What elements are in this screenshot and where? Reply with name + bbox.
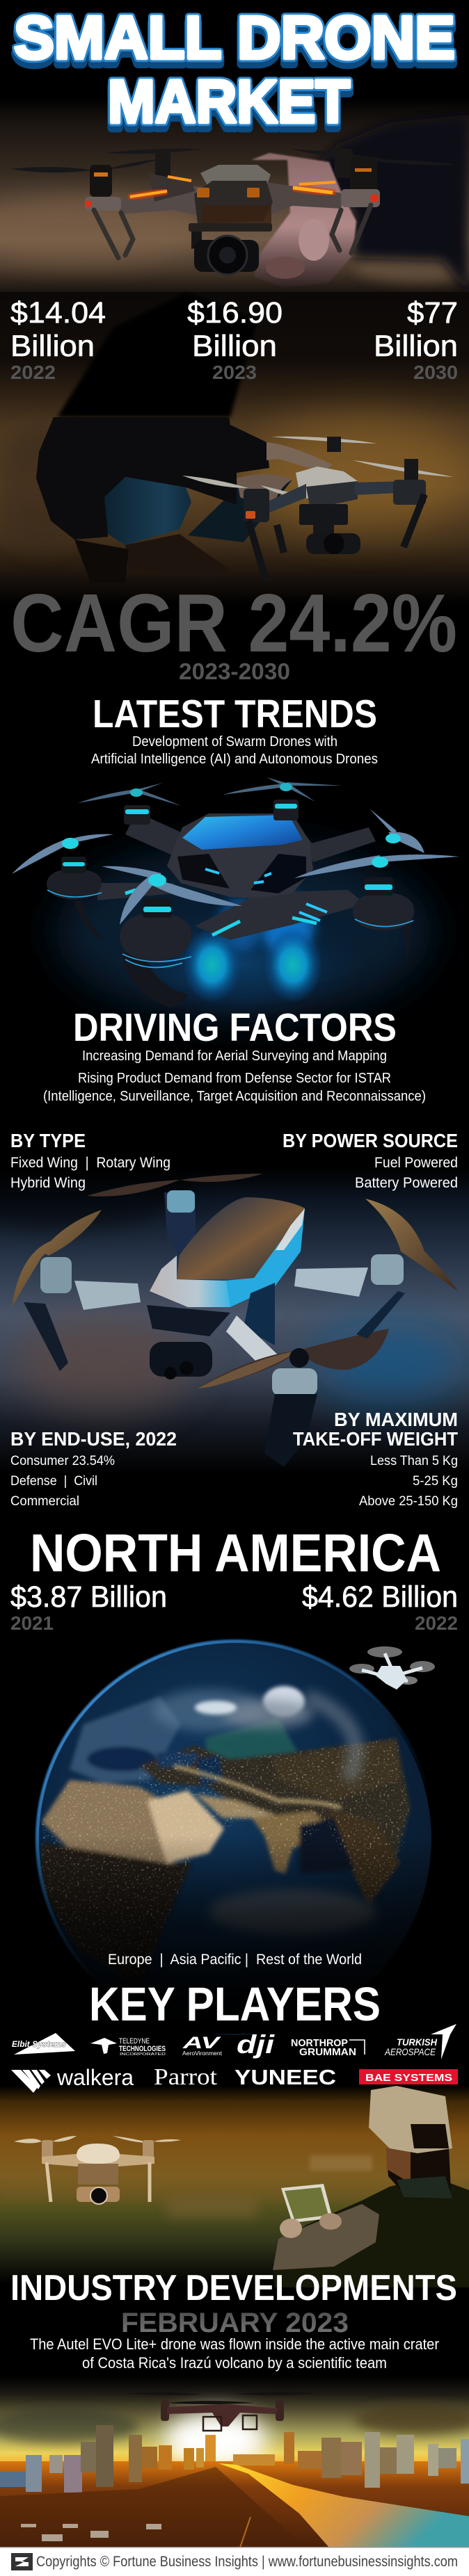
driving factors text: (Intelligence, Surveillance, Target Acquisition and Reconnaissance) bbox=[43, 1089, 426, 1104]
panel: by end-use: Commercial bbox=[10, 1494, 79, 1509]
icon: small white drone bbox=[349, 1646, 435, 1690]
panel: by maximum take-off weight bbox=[293, 1409, 458, 1509]
panel: by maximum take-off weight: TAKE-OFF WEIGHT bbox=[293, 1428, 458, 1450]
logo: Parrot: Parrot bbox=[154, 2064, 218, 2090]
market value 2023 bbox=[187, 296, 283, 383]
development text: of Costa Rica's Irazú volcano by a scientific team bbox=[82, 2354, 387, 2372]
north america value 2021: $3.87 Billion bbox=[10, 1580, 167, 1614]
market value 2030: Billion bbox=[374, 330, 458, 363]
logo: Teledyne Technologies: TECHNOLOGIES bbox=[119, 2045, 166, 2053]
footer bar bbox=[0, 2547, 469, 2576]
panel: by end-use: Consumer 23.54% bbox=[10, 1454, 115, 1468]
photo: blue glowing drone bbox=[12, 777, 459, 1019]
logo: Yuneec: YUNEEC bbox=[234, 2065, 336, 2089]
panel: by type: Hybrid Wing bbox=[10, 1175, 86, 1191]
title: MARKET bbox=[108, 68, 350, 136]
market value 2030: $77 bbox=[407, 296, 458, 330]
market value 2022: 2022 bbox=[10, 362, 56, 383]
driving factors text: Increasing Demand for Aerial Surveying and Mapping bbox=[82, 1048, 387, 1064]
market value 2023: 2023 bbox=[212, 362, 257, 383]
logo: Walkera: walkera bbox=[56, 2065, 134, 2090]
latest trends text: Artificial Intelligence (AI) and Autonomous Drones bbox=[91, 752, 378, 767]
market value 2022: $14.04 bbox=[10, 296, 106, 330]
logo: BAE Systems: BAE SYSTEMS bbox=[365, 2072, 452, 2084]
title: MARKET bbox=[108, 74, 350, 141]
north america value 2022: 2022 bbox=[415, 1612, 458, 1634]
photo: operator with tablet and drone over field bbox=[0, 2086, 469, 2287]
regions list: Europe | Asia Pacific | Rest of the World bbox=[108, 1952, 362, 1968]
panel: by type bbox=[10, 1130, 170, 1191]
title: MARKET bbox=[108, 68, 350, 136]
heading: key players: KEY PLAYERS bbox=[89, 1977, 381, 2031]
panel: by power source: Fuel Powered bbox=[374, 1155, 458, 1171]
north america value 2022 bbox=[302, 1580, 458, 1634]
north america value 2021: 2021 bbox=[10, 1612, 54, 1634]
logo: Teledyne Technologies bbox=[90, 2037, 166, 2057]
driving factors text: Rising Product Demand from Defense Sector for ISTAR bbox=[78, 1071, 391, 1086]
title bbox=[14, 4, 455, 141]
logo: AeroVironment: AV bbox=[182, 2034, 221, 2052]
CAGR period: 2023-2030 bbox=[179, 658, 290, 684]
logo: Northrop Grumman: GRUMMAN bbox=[299, 2046, 356, 2058]
panel: by power source bbox=[283, 1130, 458, 1191]
logo: Walkera bbox=[11, 2065, 134, 2093]
photo: person kneeling beside grey drone bbox=[0, 292, 469, 605]
panel: by maximum take-off weight: Above 25-150 Kg bbox=[359, 1494, 458, 1509]
panel: by maximum take-off weight: BY MAXIMUM bbox=[334, 1409, 458, 1430]
icon: Fortune Business Insights logo bbox=[11, 2553, 33, 2570]
date: february 2023: FEBRUARY 2023 bbox=[121, 2308, 349, 2338]
logo: Turkish Aerospace: TURKISH bbox=[397, 2036, 438, 2048]
photo: drone over sunset city bbox=[0, 2376, 469, 2547]
title: SMALL DRONE bbox=[14, 4, 455, 72]
panel: by maximum take-off weight: 5-25 Kg bbox=[413, 1474, 458, 1489]
north america value 2022: $4.62 Billion bbox=[302, 1580, 458, 1614]
panel: by power source: Battery Powered bbox=[355, 1175, 458, 1191]
logo: Northrop Grumman bbox=[291, 2037, 365, 2058]
heading: latest trends: LATEST TRENDS bbox=[93, 692, 377, 736]
title: SMALL DRONE bbox=[14, 4, 455, 72]
north america value 2021 bbox=[10, 1580, 167, 1634]
logo: DJI: dji bbox=[237, 2030, 275, 2059]
market value 2022 bbox=[10, 296, 106, 383]
panel: by maximum take-off weight: Less Than 5 Kg bbox=[370, 1454, 458, 1468]
logo: Teledyne Technologies: TELEDYNE bbox=[119, 2037, 150, 2046]
development text: The Autel EVO Lite+ drone was flown inside the active main crater bbox=[30, 2335, 439, 2353]
logo: Elbit Systems bbox=[12, 2033, 75, 2055]
logo: Northrop Grumman: NORTHROP bbox=[291, 2037, 348, 2049]
logo: AeroVironment bbox=[182, 2034, 223, 2057]
market value 2022: Billion bbox=[10, 330, 95, 363]
panel: by type: Fixed Wing | Rotary Wing bbox=[10, 1155, 170, 1171]
title: SMALL DRONE bbox=[14, 10, 455, 77]
panel: by end-use: BY END-USE, 2022 bbox=[10, 1428, 177, 1450]
latest trends text bbox=[91, 734, 378, 767]
market value 2023: $16.90 bbox=[187, 296, 283, 330]
market value 2030 bbox=[374, 296, 458, 383]
logo: AeroVironment: AeroVironment bbox=[182, 2050, 223, 2057]
market value 2023: Billion bbox=[192, 330, 277, 363]
logo: BAE Systems bbox=[359, 2069, 458, 2084]
panel: by end-use: Defense | Civil bbox=[10, 1474, 97, 1489]
latest trends text: Development of Swarm Drones with bbox=[132, 734, 337, 750]
driving factors text bbox=[43, 1048, 426, 1104]
panel: by end-use bbox=[10, 1428, 177, 1509]
globe bbox=[28, 1642, 445, 2036]
logos: key players bbox=[11, 2024, 458, 2093]
logo: Teledyne Technologies: INCORPORATED bbox=[120, 2052, 166, 2057]
logo: Elbit Systems: Elbit Systems bbox=[12, 2039, 66, 2049]
market value 2030: 2030 bbox=[413, 362, 458, 383]
photo: hand holding orange-lit drone bbox=[0, 97, 469, 306]
logo: Turkish Aerospace bbox=[384, 2024, 456, 2059]
panel: by type: BY TYPE bbox=[10, 1130, 86, 1151]
heading: driving factors: DRIVING FACTORS bbox=[73, 1005, 397, 1050]
logo: Turkish Aerospace: AEROSPACE bbox=[384, 2046, 436, 2057]
development text bbox=[30, 2335, 439, 2372]
photo: white and cyan drone bbox=[0, 1133, 469, 1474]
